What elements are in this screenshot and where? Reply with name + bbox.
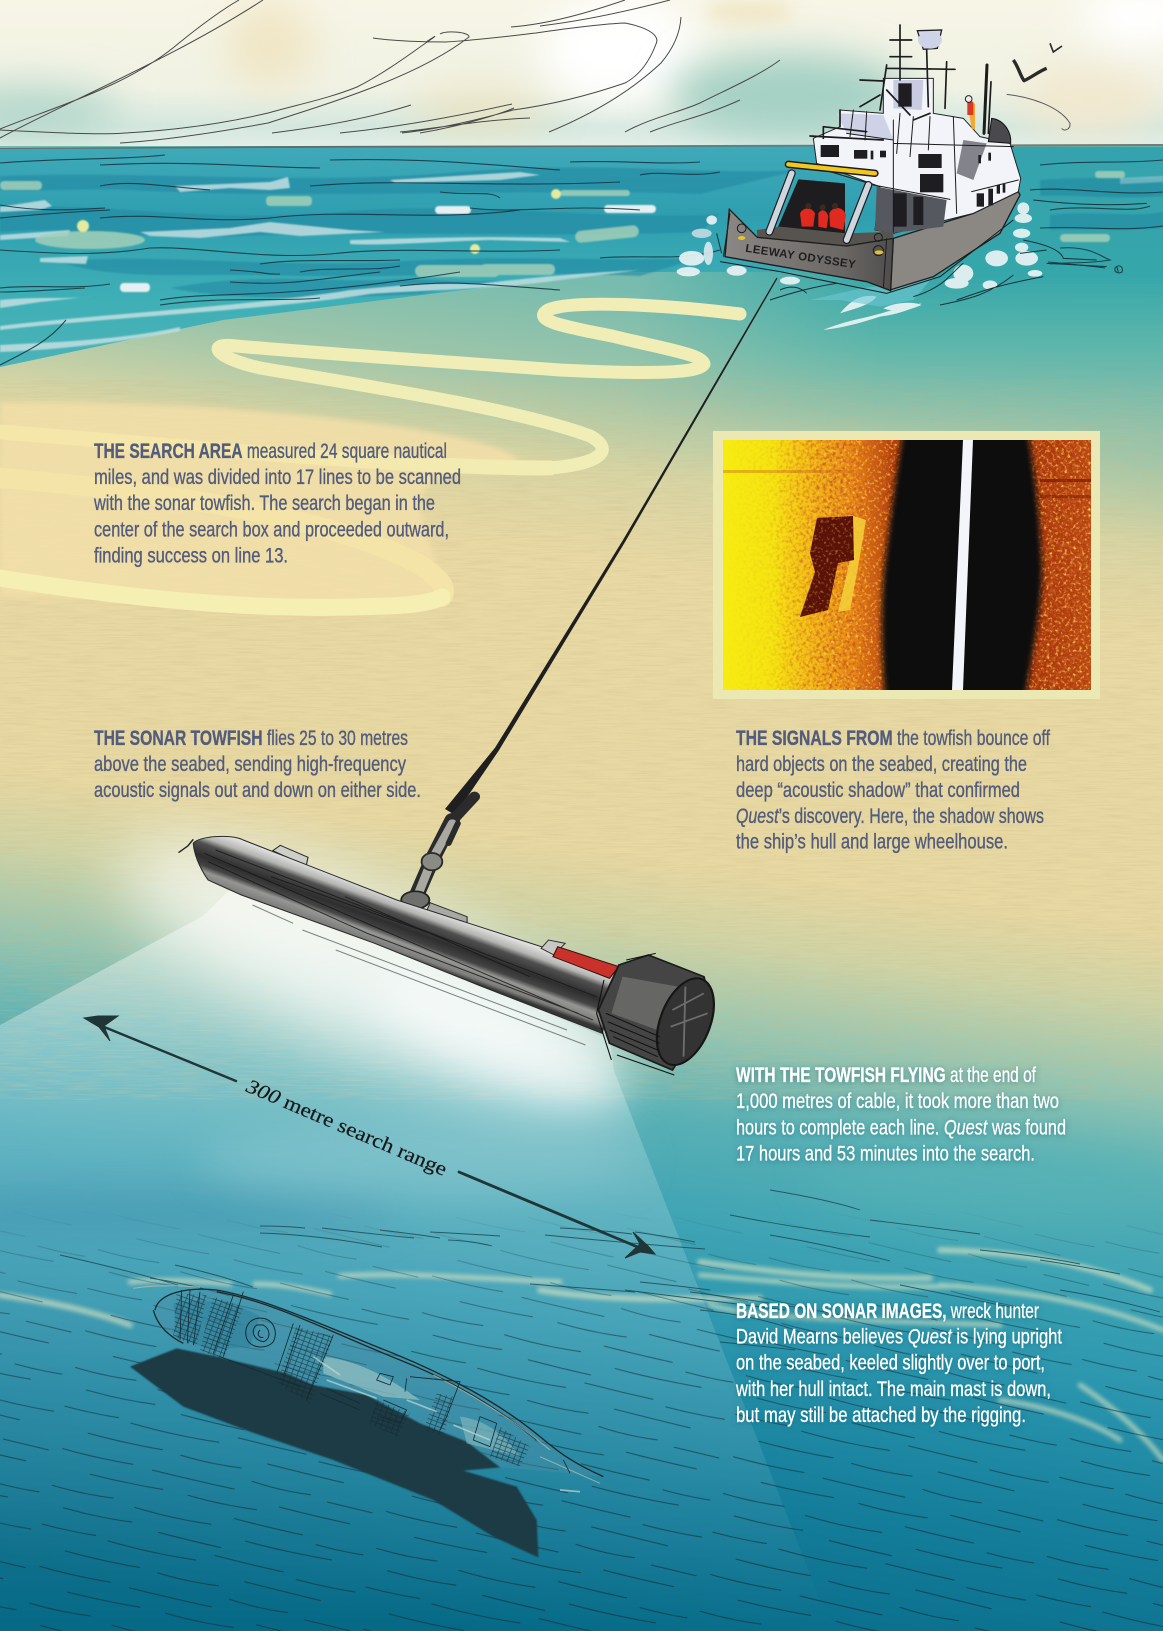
text: with the towfish flying [736,1064,1066,1166]
tow stem [401,797,474,909]
horizon line [0,145,1163,149]
upper sketch lines on the seabed [60,1190,1160,1350]
gull small [1050,43,1062,52]
A-frame [769,164,875,240]
survey ship [677,25,1147,330]
range label: 300 metre search range [242,1075,450,1181]
sea surface right of the ship [668,147,1163,416]
sea highlights [0,171,1163,352]
text: the signals: the ship’s hull and large wheelhouse. [736,830,1008,854]
windows [821,83,1005,227]
text: based on sonar images: David Mearns believes Quest is lying upright [736,1326,1062,1348]
wreck target shadow [800,516,854,617]
wreck target speckle [803,516,854,614]
crew in red [800,208,846,230]
text: the signals: Quest’s discovery. Here, the shadow shows [736,805,1044,828]
stern deck opening [777,179,845,233]
text: the search area: THE SEARCH AREA measured 24 square nautical [94,440,447,463]
acoustic shadow [882,430,1042,700]
towfish nadir line [952,440,973,690]
crew heads [805,203,838,210]
text: the search area: finding success on line 13. [94,544,288,568]
masts and rigging [810,25,1018,233]
underwater tone patches [0,1120,1163,1238]
wreck shadow [130,1348,538,1557]
text: the sonar towfish: above the seabed, sending high-frequency [94,753,406,776]
wreck hull tint [155,1289,603,1477]
text: with the towfish flying: 1,000 metres of cable, it took more than two [736,1090,1059,1113]
towfish shadow strokes [252,905,586,1045]
wreck structure [133,1286,603,1492]
fin plates [273,845,308,866]
hull side [890,192,1020,290]
underwater light streaks [0,1250,1163,1460]
glow around towfish [93,792,647,1148]
winch drum [988,118,1011,143]
gull large [1013,60,1047,81]
text: the signals: THE SIGNALS FROM the towfish bounce off [736,727,1050,750]
hull details [720,213,1013,293]
text: based on sonar images: BASED ON SONAR IMAGES, wreck hunter [736,1300,1039,1323]
paper grain texture [0,380,1163,1100]
nose tip [178,839,193,853]
sonar towfish [178,797,725,1075]
buoy markers [738,236,883,254]
distant rope [1007,94,1070,130]
tail cylinder [597,953,725,1075]
towing cable [445,278,778,815]
text: the search area: center of the search box and proceeded outward, [94,518,449,542]
red light [541,940,619,978]
text: with the towfish flying: WITH THE TOWFISH FLYING at the end of [736,1064,1036,1087]
search pattern lines [0,304,740,607]
sky pen strokes [0,0,780,143]
sonar image frame [713,431,1100,699]
search area sand tint [0,402,520,608]
sea colour bands [0,167,1163,298]
text: with the towfish flying: 17 hours and 53 minutes into the search. [736,1142,1035,1166]
seabed hatching [0,1210,1163,1631]
300 metre range arrow [84,1016,655,1258]
text: the signals [736,727,1050,854]
text: the search area: miles, and was divided into 17 lines to be scanned [94,466,461,489]
text: the sonar towfish: THE SONAR TOWFISH flies 25 to 30 metres [94,727,408,750]
text: the sonar towfish: acoustic signals out and down on either side. [94,779,421,802]
wake colour [810,277,933,307]
text: the search area: with the sonar towfish. The search began in the [93,492,435,515]
sky [0,0,1163,147]
ship name: LEEWAY ODYSSEY [745,243,857,271]
wake foam [677,202,1042,330]
wreck of Quest [130,1286,603,1557]
stern transom [725,209,893,291]
text: based on sonar images: but may still be attached by the rigging. [736,1404,1026,1427]
crew on mast [965,96,975,130]
wreck target highlight [838,516,866,612]
text: the search area [93,440,461,568]
superstructure [813,78,1021,233]
sea surface [0,146,900,367]
sonar cone of light [0,880,832,1631]
stern deck [757,227,893,246]
text: the signals: deep “acoustic shadow” that confirmed [736,779,1020,802]
fish body [193,836,619,1033]
wake pen strokes [717,200,1147,305]
text: based on sonar images: with her hull intact. The main mast is down, [735,1378,1051,1401]
text: with the towfish flying: hours to complete each line. Quest was found [736,1116,1066,1140]
text: based on sonar images: on the seabed, keeled slightly over to port, [736,1352,1045,1374]
text: the sonar towfish [94,727,421,802]
sea pen strokes [0,155,1163,365]
radar dome [917,30,942,49]
text: based on sonar images [735,1300,1062,1427]
sonar scan image [723,430,1091,700]
text: the signals: hard objects on the seabed, creating the [736,753,1027,776]
